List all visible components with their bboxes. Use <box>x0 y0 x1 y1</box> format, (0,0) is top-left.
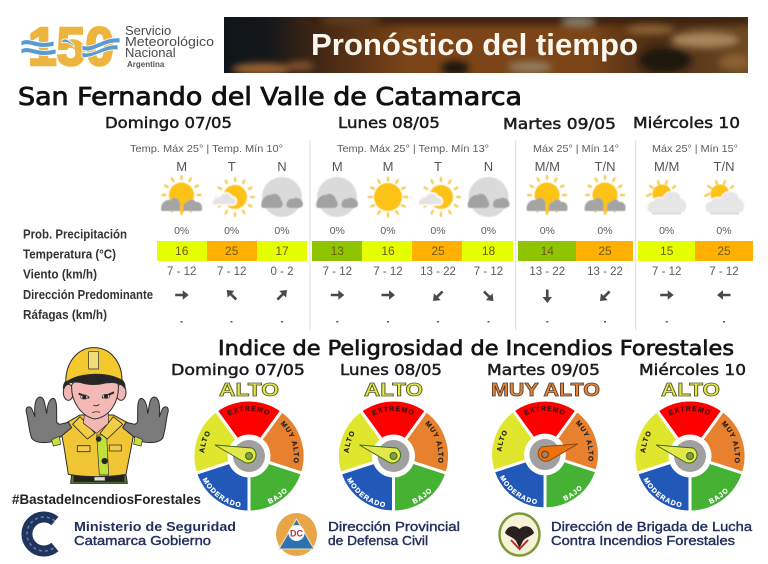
gauge: Domingo <box>194 402 304 510</box>
wind row <box>167 266 739 278</box>
danger level labels: ALTO <box>219 380 279 400</box>
period row: N <box>277 159 287 174</box>
gauge: Martes: MODERADO <box>500 475 537 504</box>
precipitation row: 0% <box>330 225 345 237</box>
max and min temperature rows: Temp. Máx 25° | Temp. Mín 10° <box>130 143 283 155</box>
trousers and belt <box>71 474 127 483</box>
weather icons <box>161 176 745 217</box>
wind row: 0 - 2 <box>270 266 294 278</box>
temperature strip: 25 <box>598 244 612 258</box>
period row: T/N <box>595 159 615 174</box>
day headings: forecast <box>105 114 740 133</box>
temperature strip <box>157 241 753 261</box>
logo: Brigada de Lucha <box>500 514 753 556</box>
day headings: fire index: Domingo 07/05 <box>171 361 305 379</box>
row labels: Viento (km/h) <box>23 268 97 282</box>
day headings: fire index: Miércoles 10 <box>639 361 746 379</box>
wind row: 7 - 12 <box>217 266 246 278</box>
gauge: Miércoles: EXTREMO <box>668 406 710 416</box>
needle <box>656 445 697 463</box>
neck and face <box>83 410 108 433</box>
icon: firefighter stop gesture <box>26 348 168 483</box>
logo: Brigada de Lucha: Dirección de Brigada de Lucha <box>551 519 753 534</box>
banner: Pronóstico del tiempo: Pronóstico del tiempo <box>311 27 638 62</box>
temperature strip: 25 <box>225 244 239 258</box>
gauge: Domingo: MUY ALTO <box>280 420 299 463</box>
period row: T <box>434 159 442 174</box>
gauge: Martes: MUY ALTO <box>576 420 594 462</box>
temperature strip: 25 <box>717 244 731 258</box>
precipitation row <box>174 225 732 237</box>
logo: Servicio Meteorológico Nacional 150: 150 <box>28 17 114 77</box>
logo: Ministerio de Seguridad: Ministerio de Seguridad <box>74 519 236 534</box>
day headings: fire index <box>171 361 746 379</box>
row labels: Temperatura (°C) <box>23 248 116 262</box>
precipitation row: 0% <box>224 225 239 237</box>
wind direction arrows <box>175 287 730 304</box>
wind row: 7 - 12 <box>167 266 196 278</box>
temperature strip: 13 <box>331 244 344 258</box>
logo: Brigada de Lucha: Contra Incendios Forestales <box>551 533 736 548</box>
wind row: 7 - 12 <box>652 266 681 278</box>
precipitation row: 0% <box>380 225 396 237</box>
gauge: Martes: EXTREMO <box>524 406 565 416</box>
temperature strip: 17 <box>275 244 289 258</box>
hashtag: #BastadeIncendiosForestales <box>12 492 201 507</box>
gauge: Miércoles: MUY ALTO <box>722 420 740 463</box>
forecast table <box>23 140 753 330</box>
logo: Defensa Civil: DC <box>290 528 303 538</box>
day headings: forecast: Lunes 08/05 <box>338 114 440 132</box>
hair <box>63 375 125 388</box>
wind row: 13 - 22 <box>529 266 565 278</box>
gauge: Domingo: BAJO <box>268 488 287 504</box>
left glove <box>26 397 72 446</box>
day headings: fire index: Martes 09/05 <box>487 361 600 379</box>
temperature strip: 18 <box>482 244 495 258</box>
heading: city name: San Fernando del Valle de Catamarca <box>18 82 522 111</box>
logo: Ministerio de Seguridad <box>27 517 236 551</box>
jacket <box>60 415 135 477</box>
period row: M <box>383 159 393 174</box>
logo: Defensa Civil: de Defensa Civil <box>328 533 428 548</box>
precipitation row: 0% <box>481 225 496 237</box>
gauge: Miércoles: ALTO <box>640 431 651 454</box>
temperature strip: 16 <box>381 244 395 258</box>
logo: Defensa Civil: Dirección Provincial <box>328 519 460 534</box>
helmet <box>66 348 122 382</box>
gauge: Lunes: ALTO <box>344 431 354 454</box>
gauge: Martes <box>492 402 598 508</box>
period row: M <box>332 159 343 174</box>
row labels: Ráfagas (km/h) <box>23 308 107 322</box>
period row: T <box>228 159 236 174</box>
precipitation row: 0% <box>430 225 446 237</box>
gauge: Miércoles <box>635 402 745 510</box>
wind row: 13 - 22 <box>587 266 623 278</box>
day headings: forecast: Domingo 07/05 <box>105 114 232 132</box>
row labels: Prob. Precipitación <box>23 228 127 242</box>
temperature strip: 25 <box>431 244 445 258</box>
gauge: Lunes: EXTREMO <box>372 406 414 416</box>
period row: M/M <box>654 159 679 174</box>
wind row: 7 - 12 <box>323 266 352 278</box>
period row <box>176 159 734 174</box>
precipitation row: 0% <box>540 225 555 237</box>
wind row: 7 - 12 <box>373 266 403 278</box>
wind row: 7 - 12 <box>709 266 739 278</box>
period row: M/M <box>535 159 560 174</box>
row labels <box>23 228 153 322</box>
gauge: Miércoles: MODERADO <box>644 477 682 507</box>
precipitation row: 0% <box>597 225 613 237</box>
period row: T/N <box>714 159 734 174</box>
precipitation row: 0% <box>274 225 290 237</box>
period row: M <box>176 159 187 174</box>
day headings: fire index: Lunes 08/05 <box>340 361 442 379</box>
wind row: 13 - 22 <box>420 266 456 278</box>
max and min temperature rows: Máx 25° | Mín 15° <box>652 143 738 155</box>
gauge: Domingo: EXTREMO <box>227 406 270 416</box>
needle <box>360 445 401 463</box>
logo: Servicio Meteorológico Nacional 150 <box>21 17 214 77</box>
gauge: Martes: ALTO <box>496 430 507 452</box>
precipitation row: 0% <box>659 225 674 237</box>
danger level labels: ALTO <box>364 380 423 400</box>
logo: Servicio Meteorológico Nacional 150: Nacional <box>125 45 176 60</box>
eyes and mouth <box>79 392 114 398</box>
banner: Pronóstico del tiempo <box>224 15 751 75</box>
gauge: Martes: BAJO <box>563 486 582 501</box>
gauge: Domingo: ALTO <box>199 431 210 454</box>
max and min temperature rows <box>130 143 738 155</box>
danger level labels: MUY ALTO <box>491 380 600 400</box>
precipitation row: 0% <box>174 225 189 237</box>
gauge: Miércoles: BAJO <box>708 488 728 504</box>
day headings: forecast: Miércoles 10 <box>633 114 740 132</box>
max and min temperature rows: Temp. Máx 25° | Temp. Mín 13° <box>337 143 489 155</box>
column dividers <box>310 140 636 330</box>
temperature strip: 16 <box>175 244 189 258</box>
logo: Servicio Meteorológico Nacional 150: Argentina <box>127 60 165 69</box>
danger level labels: ALTO <box>661 380 720 400</box>
max and min temperature rows: Máx 25° | Mín 14° <box>533 143 619 155</box>
gauge: Lunes: BAJO <box>412 488 432 504</box>
gauge: Lunes: MUY ALTO <box>425 420 444 463</box>
gauge: Lunes <box>338 402 448 510</box>
row labels: Dirección Predominante <box>23 288 153 302</box>
temperature strip: 15 <box>660 244 674 258</box>
logo: Ministerio de Seguridad: Catamarca Gobierno <box>74 533 211 548</box>
heading: fire danger index: Indice de Peligrosidad de Incendios Forestales <box>218 336 734 360</box>
day headings: forecast: Martes 09/05 <box>503 115 616 133</box>
right glove <box>123 397 168 446</box>
needle <box>538 444 578 461</box>
danger level labels <box>219 380 720 400</box>
wind row: 7 - 12 <box>474 266 503 278</box>
gauge: Lunes: MODERADO <box>347 477 386 507</box>
gusts row <box>180 321 725 322</box>
gauge: Domingo: MODERADO <box>202 477 241 507</box>
logo: Servicio Meteorológico Nacional 150: Meteorológico <box>125 34 214 49</box>
logo: Defensa Civil <box>276 513 460 556</box>
temperature strip: 14 <box>541 244 554 258</box>
logo: Servicio Meteorológico Nacional 150: Servicio <box>125 23 171 38</box>
needle <box>215 445 256 463</box>
precipitation row: 0% <box>716 225 732 237</box>
period row: N <box>484 159 493 174</box>
